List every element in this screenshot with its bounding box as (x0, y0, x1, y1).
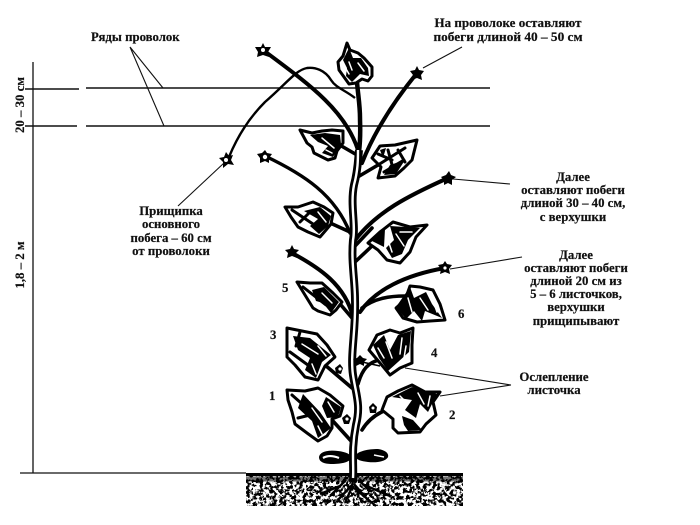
plant numbers: 2 (449, 408, 455, 422)
plant numbers: 5 (282, 281, 288, 295)
leaf: 3 (287, 328, 335, 380)
plant numbers (269, 281, 465, 422)
callout: main shoot pinching: Прищипка (139, 204, 203, 218)
label: wire rows (91, 30, 180, 126)
callout: leaf blinding: листочка (527, 383, 581, 397)
callout: next shoots 20 cm: 5 – 6 листочков, (530, 287, 622, 301)
callout: next shoots 30-40 cm: Далее (556, 170, 590, 184)
leaf: 1 (287, 388, 343, 441)
leaf stems (325, 144, 405, 442)
leaf: top (338, 43, 372, 84)
leaf: 6 (396, 286, 445, 322)
star: third right shoot (438, 261, 452, 274)
plant numbers: 3 (270, 328, 276, 342)
shoot: third right (360, 268, 445, 312)
wire rows (25, 88, 490, 126)
callout: leaf blinding (405, 368, 589, 397)
leaf: 2 (382, 385, 440, 433)
cotyledon leaves (319, 449, 388, 464)
star: second right shoot (441, 171, 456, 185)
star: upper left shoot (255, 43, 271, 57)
leaf: 5 (297, 282, 342, 315)
callout: next shoots 20 cm: длиной 20 см из (530, 274, 622, 288)
shoot: upper left (263, 50, 358, 150)
callout: next shoots 20 cm (450, 248, 628, 328)
leaf: upper right (372, 140, 417, 178)
leaf: upper left (300, 130, 343, 160)
shoot: upper right (362, 73, 417, 163)
soil (246, 473, 463, 506)
callout: next shoots 30-40 cm: длиной 30 – 40 см, (521, 196, 625, 210)
shoot: second right (353, 178, 448, 243)
plant numbers: 1 (269, 389, 275, 403)
callout: next shoots 20 cm: верхушки (547, 300, 605, 314)
callout: next shoots 30-40 cm: с верхушки (540, 210, 607, 224)
axis label: 20-30 cm: 20 – 30 см (13, 77, 27, 133)
height axis (20, 62, 246, 473)
star: second left shoot (257, 150, 272, 163)
leaf: second right (368, 222, 427, 263)
star: third left shoot (285, 245, 299, 258)
callout: main shoot pinching: от проволоки (132, 244, 210, 258)
callout: next shoots 20 cm: оставляют побеги (524, 261, 628, 275)
plant numbers: 6 (458, 307, 465, 321)
callout: main shoot pinching: побега – 60 см (130, 231, 212, 245)
callout: shoots on wire: побеги длиной 40 – 50 см (434, 30, 583, 44)
plant shoots and side branches (229, 50, 448, 442)
callout: main shoot pinching (130, 163, 224, 258)
star: upper right shoot (410, 66, 424, 80)
small pinched side-shoot stars (335, 355, 380, 424)
callout: shoots on wire (423, 16, 583, 68)
leaf: second left (285, 202, 333, 237)
star: pinched main shoot (219, 152, 234, 168)
main stem (352, 82, 360, 482)
callout: main shoot pinching: основного (142, 217, 200, 231)
callout: leaf blinding: Ослепление (519, 370, 589, 384)
axis label: 1.8-2 m: 1,8 – 2 м (13, 241, 27, 289)
plant numbers: 4 (431, 346, 438, 360)
label: wire rows: Ряды проволок (91, 30, 180, 44)
shoot: second left (265, 156, 350, 233)
callout: next shoots 30-40 cm: оставляют побеги (521, 183, 625, 197)
callout: next shoots 30-40 cm (453, 170, 625, 224)
callout: shoots on wire: На проволоке оставляют (434, 16, 582, 30)
callout: next shoots 20 cm: Далее (559, 248, 593, 262)
shoot: third left (292, 253, 353, 317)
thin main shoot arc (229, 68, 355, 157)
callout: next shoots 20 cm: прищипывают (533, 314, 620, 328)
leaf: 4 (369, 328, 413, 375)
